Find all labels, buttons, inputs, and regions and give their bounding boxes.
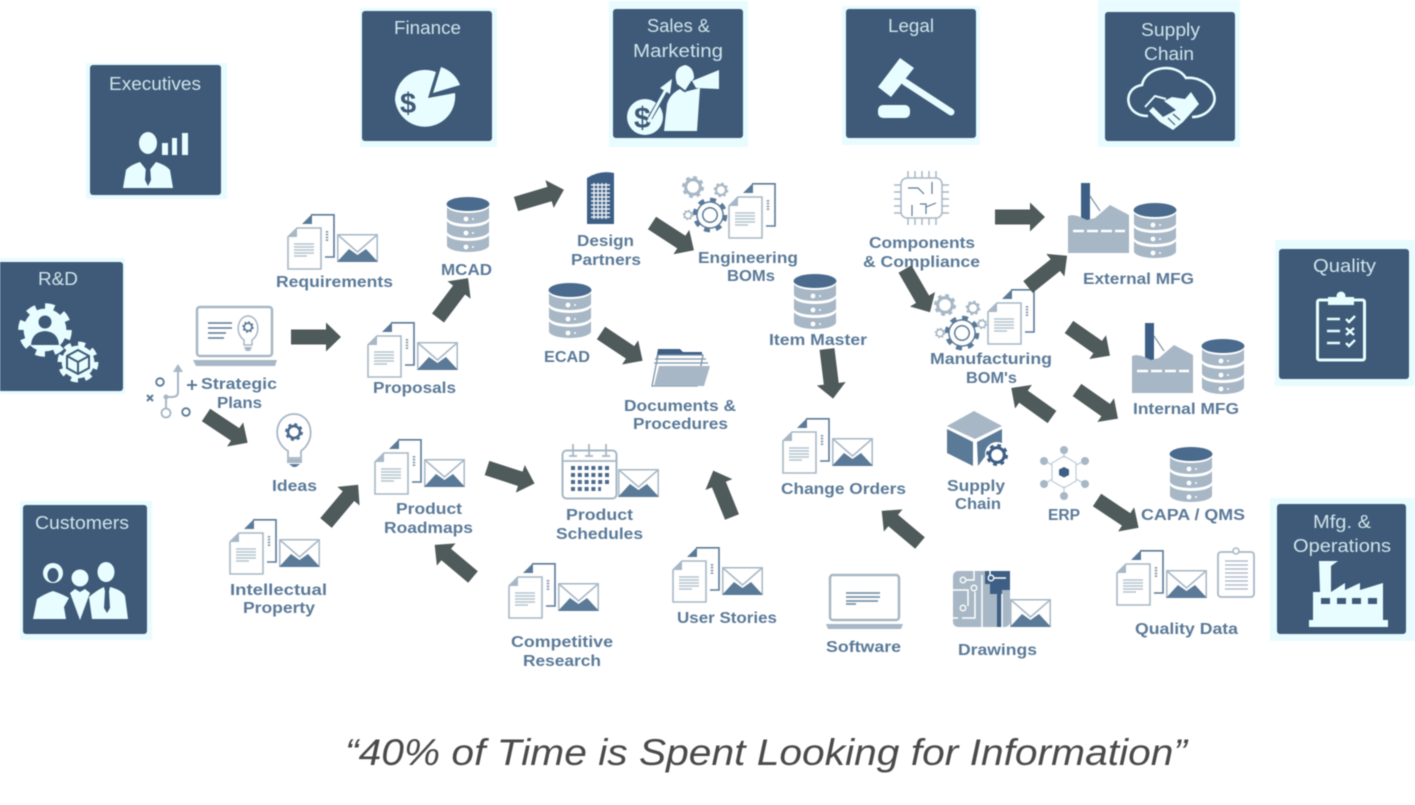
label: Ideas: Ideas — [272, 478, 317, 495]
icon: executive with bar chart — [123, 132, 188, 188]
panel: Finance — [360, 8, 497, 147]
label: Manufacturing BOM's: BOM's — [966, 370, 1017, 387]
panel: Supply Chain — [1098, 0, 1240, 147]
node: Item Master — [769, 274, 867, 349]
node: Engineering BOMs — [683, 177, 798, 285]
arrow: Intellectual Property to Product Roadmaps — [315, 475, 369, 532]
arrow: Strategic Plans to Ideas — [198, 403, 256, 455]
arrow: Manufacturing BOMs to Internal MFG — [1061, 315, 1118, 368]
heading: Sales & Marketing: Marketing — [633, 41, 723, 61]
label: Change Orders: Change Orders — [781, 481, 906, 498]
arrow: Product Roadmaps to Product Schedules — [483, 454, 539, 497]
node: Product Schedules — [556, 444, 659, 543]
node: ERP — [1040, 446, 1089, 524]
panel: Quality — [1275, 240, 1415, 386]
panel: Mfg. & Operations — [1270, 498, 1415, 641]
arrow: Supply Chain to Manufacturing BOMs — [1003, 376, 1060, 429]
icon: checklist clipboard — [1318, 292, 1364, 360]
arrow: User Stories to Documents — [700, 465, 745, 522]
label: Product Schedules: Schedules — [556, 526, 643, 543]
label: Components & Compliance: & Compliance — [863, 254, 980, 271]
icon: cloud handshake — [1128, 68, 1215, 130]
icon: pie chart with dollar: $ — [400, 88, 416, 120]
arrow: MCAD to Design Partners — [512, 176, 568, 218]
node: Requirements — [276, 214, 393, 291]
label: Engineering BOMs: Engineering — [698, 250, 798, 267]
label: Drawings: Drawings — [958, 642, 1037, 659]
node: ECAD — [544, 283, 592, 366]
node: External MFG — [1068, 183, 1194, 288]
arrow: toward Internal MFG — [1069, 378, 1126, 431]
label: Internal MFG: Internal MFG — [1133, 401, 1239, 418]
node: Manufacturing BOM's — [930, 289, 1052, 387]
node: Documents & Procedures — [624, 349, 736, 433]
panel: Customers — [20, 501, 152, 640]
heading: Mfg. & Operations: Operations — [1293, 536, 1391, 556]
label: Product Roadmaps: Product — [396, 501, 462, 518]
icon: gavel — [878, 58, 951, 118]
node: Intellectual Property — [230, 519, 327, 617]
node: Proposals — [368, 322, 458, 397]
node: User Stories — [673, 547, 777, 627]
label: Proposals: Proposals — [373, 380, 456, 397]
label: Supply Chain: Chain — [955, 496, 1001, 513]
heading: Mfg. & Operations: Mfg. & — [1313, 512, 1371, 532]
icon: marketer with megaphone and coin: $ — [634, 102, 651, 135]
label: Strategic Plans: Strategic — [201, 376, 277, 393]
label: Components & Compliance: Components — [869, 235, 975, 252]
label: CAPA / QMS: CAPA / QMS — [1141, 507, 1245, 524]
node: Strategic Plans — [147, 364, 277, 418]
label: MCAD: MCAD — [441, 262, 492, 279]
panel: Legal — [842, 6, 980, 145]
label: User Stories: User Stories — [677, 610, 777, 627]
arrow: Drawings to Change Orders — [872, 500, 929, 554]
arrow: Item Master to Change Orders — [813, 347, 847, 400]
icon: marketer with megaphone and coin — [627, 65, 719, 135]
icon: factory — [1309, 561, 1388, 627]
panel: Executives — [86, 63, 227, 199]
node: CAPA / QMS — [1141, 447, 1245, 524]
heading: Supply Chain: Supply — [1141, 20, 1200, 40]
label: Competitive Research: Research — [523, 653, 601, 670]
heading: Executives: Executives — [109, 74, 201, 94]
heading: Quality: Quality — [1313, 256, 1376, 276]
node: Software — [826, 575, 903, 656]
arrow: ECAD to Documents — [593, 321, 651, 373]
label: ECAD: ECAD — [544, 349, 590, 366]
panel: Sales & Marketing — [609, 1, 748, 147]
arrow: Competitive Research to Product Roadmaps — [425, 534, 482, 588]
heading: Finance: Finance — [394, 18, 461, 38]
label: Design Partners: Partners — [571, 252, 641, 269]
icon: gears with person and cube — [22, 307, 96, 380]
node: Components & Compliance — [863, 171, 980, 271]
label: Item Master: Item Master — [769, 332, 867, 349]
node: Product Roadmaps — [375, 439, 473, 537]
label: Quality Data: Quality Data — [1135, 621, 1238, 638]
label: ERP: ERP — [1048, 507, 1080, 524]
label: Product Roadmaps: Roadmaps — [384, 520, 473, 537]
label: Strategic Plans: Plans — [217, 395, 262, 412]
node: Change Orders — [781, 418, 906, 498]
label: Intellectual Property: Property — [243, 600, 315, 617]
icon: three people — [33, 562, 128, 620]
heading: Sales & Marketing: Sales & — [647, 16, 710, 36]
node: Supply Chain box — [947, 411, 1009, 513]
arrow: Strategic Plans laptop to Proposals — [291, 322, 341, 352]
label: Manufacturing BOM's: Manufacturing — [930, 351, 1052, 368]
heading: Supply Chain: Chain — [1144, 44, 1194, 64]
heading: Customers: Customers — [35, 513, 129, 533]
panel: R&D — [0, 258, 125, 394]
node: Competitive Research — [509, 563, 613, 670]
node: Internal MFG — [1132, 323, 1244, 418]
label: Engineering BOMs: BOMs — [727, 268, 775, 285]
label: Documents & Procedures: Procedures — [633, 416, 728, 433]
node: Quality Data — [1117, 548, 1254, 638]
heading: Legal: Legal — [888, 16, 934, 36]
node: Design Partners — [571, 172, 641, 269]
label: External MFG: External MFG — [1083, 271, 1194, 288]
heading: R&D: R&D — [38, 269, 78, 289]
label: Intellectual Property: Intellectual — [230, 582, 327, 599]
label: Design Partners: Design — [577, 233, 634, 250]
arrow: Components to External MFG — [995, 202, 1045, 232]
label: Software: Software — [826, 639, 901, 656]
node: laptop with idea — [193, 307, 277, 366]
node: MCAD — [441, 197, 492, 279]
label: Documents & Procedures: Documents & — [624, 398, 736, 415]
arrow: Design Partners to Engineering BOMs — [644, 211, 702, 262]
label: Competitive Research: Competitive — [511, 634, 613, 651]
node: Ideas — [272, 414, 317, 495]
quote: “40% of Time is Spent Looking for Information” — [345, 732, 1189, 773]
node: Drawings — [953, 571, 1051, 659]
arrow: Proposals to MCAD — [426, 269, 480, 327]
arrow: ERP to Quality Data — [1089, 488, 1147, 540]
arrow: Components to Manufacturing BOMs — [892, 262, 943, 320]
label: Product Schedules: Product — [566, 507, 633, 524]
label: Requirements: Requirements — [276, 274, 393, 291]
arrow: Manufacturing BOMs to External MFG — [1019, 244, 1076, 298]
label: Supply Chain: Supply — [947, 478, 1005, 495]
